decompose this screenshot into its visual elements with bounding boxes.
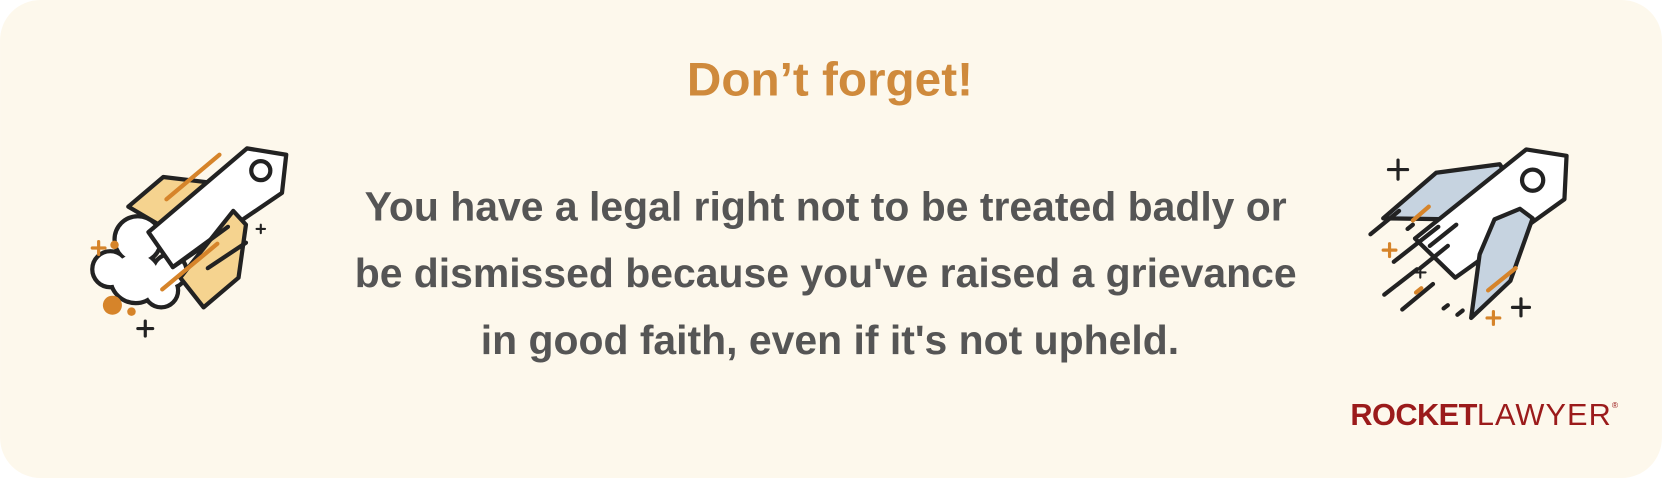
body text: be dismissed because you've raised a grievance — [355, 250, 1297, 296]
logo: ROCKETLAWYER — [1350, 397, 1612, 432]
icon: left rocket — [94, 148, 286, 336]
logo: ® — [1612, 400, 1619, 410]
body text: You have a legal right not to be treated badly or — [365, 183, 1287, 229]
body text: in good faith, even if it's not upheld. — [481, 317, 1179, 363]
cloud — [94, 218, 184, 305]
icon: right rocket — [1370, 149, 1567, 318]
body text — [355, 183, 1297, 363]
title: Don’t forget! — [687, 53, 973, 106]
